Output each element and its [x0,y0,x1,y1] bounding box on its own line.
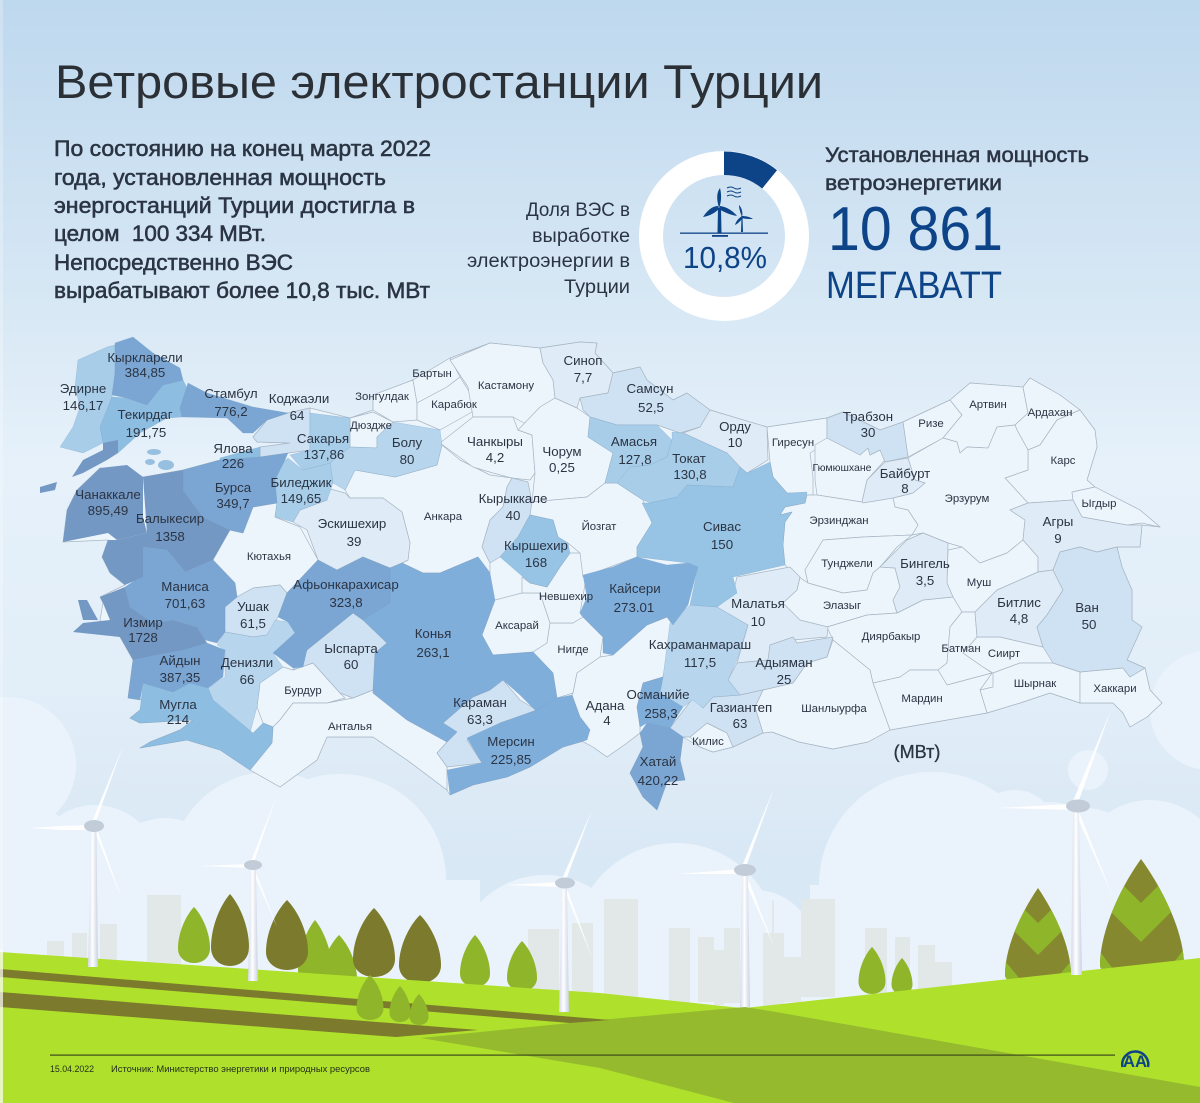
donut chart 10.8% [651,152,797,309]
back trees [178,894,912,995]
label: Орду: Орду [719,419,751,434]
label: Бурдур: Бурдур [284,685,322,697]
label: Мугла: 214 [167,712,189,727]
intro paragraph: целом 100 334 МВт. [54,221,266,246]
label: Балыкесир: 1358 [155,529,185,544]
label: Афьонкарахисар: Афьонкарахисар [293,577,399,592]
label: Чорум: 0,25 [549,460,575,475]
label: Малатья: 10 [751,614,765,629]
label: Карабюк: Карабюк [431,399,478,411]
installed capacity heading [825,144,1089,195]
label: Чанаккале: Чанаккале [75,487,141,502]
label: Эдирне: 146,17 [63,398,103,413]
label: Эдирне: Эдирне [60,381,106,396]
intro paragraph: По состоянию на конец марта 2022 [54,136,431,161]
label: Коджаэли: 64 [290,408,304,423]
label: Караман: Караман [453,695,507,710]
label: Маниса: 701,63 [165,596,205,611]
label: Амасья: Амасья [611,434,657,449]
label: Ушак: Ушак [237,599,269,614]
AA logo: AA [1123,1052,1147,1071]
label: Гюмюшхане: Гюмюшхане [813,462,872,474]
label: Агры: Агры [1043,514,1073,529]
share caption: Турции [564,277,630,298]
label: Конья: 263,1 [416,645,450,660]
label: Битлис: 4,8 [1010,611,1028,626]
label: Синоп: 7,7 [574,370,592,385]
label: Измир: 1728 [128,630,158,645]
brown stripe upper [0,969,610,1023]
label: Муш: Муш [967,577,991,589]
provinces without data [213,343,1162,790]
share caption: электроэнергии в [467,251,630,272]
label: Мерсин: 225,85 [491,752,531,767]
label: Элазыг: Элазыг [823,600,861,612]
label: Ризе: Ризе [918,418,944,430]
label: Ардахан: Ардахан [1028,407,1072,419]
map labels with capacity values [60,350,1099,788]
icon: wind turbines [680,187,768,237]
label: Денизли: 66 [240,672,254,687]
label: Гиресун: Гиресун [772,437,814,449]
label: Эрзинджан: Эрзинджан [809,515,869,527]
label: Ыгдыр: Ыгдыр [1082,498,1116,510]
label: Невшехир: Невшехир [539,591,593,603]
share caption: выработке [532,226,630,247]
brown stripe lower [0,992,478,1037]
label: Стамбул: Стамбул [204,386,258,401]
wind turbine 1 [30,746,123,967]
label: Газиантеп: 63 [733,716,747,731]
label: Сакарья: Сакарья [297,431,349,446]
label: Караман: 63,3 [467,712,493,727]
label: Тунджели: Тунджели [821,558,873,570]
map labels without values [247,368,1137,748]
label: Йозгат: Йозгат [582,520,617,533]
label: Кырыккале: 40 [506,508,520,523]
label: Мерсин: Мерсин [487,734,535,749]
label: Кастамону: Кастамону [478,380,534,392]
label: Токат: 130,8 [673,467,707,482]
unit label: (МВт) [894,742,940,762]
label: Синоп: Синоп [564,353,602,368]
western dark provinces [40,440,230,660]
label: Адыяман: Адыяман [755,655,813,670]
label: Анталья: Анталья [328,721,372,733]
label: Трабзон: 30 [861,425,875,440]
label: Кыршехир: Кыршехир [504,538,568,553]
wind turbine 4 [678,788,774,1007]
intro paragraph: года, установленная мощность [54,165,386,190]
label: Зонгулдак: Зонгулдак [355,391,410,403]
label: Болу: 80 [400,452,414,467]
big tree right [1100,859,1184,969]
big tree left [1005,888,1071,980]
label: Османийе: Османийе [626,687,690,702]
label: Эрзурум: Эрзурум [945,493,989,505]
label: Шанлыурфа: Шанлыурфа [801,703,867,715]
label: Айдын: Айдын [160,653,200,668]
label: Болу: Болу [392,435,422,450]
wind turbine 5 [998,710,1113,975]
installed capacity heading: Установленная мощность [825,144,1089,167]
lightly shaded provinces [293,342,1142,663]
wind turbine 2 [199,798,277,981]
label: Адыяман: 25 [777,672,791,687]
label: Кахраманмараш: 117,5 [684,655,716,670]
title: Ветровые электростанции Турции [55,55,823,108]
capacity unit: МЕГАВАТТ [826,265,1002,307]
label: Эскишехир: Эскишехир [318,516,386,531]
label: Конья: Конья [415,626,451,641]
label: Хатай: Хатай [640,754,676,769]
label: Сиирт: Сиирт [988,648,1021,660]
label: Кыршехир: 168 [525,555,547,570]
intro paragraph [54,136,431,303]
footer source: Источник: Министерство энергетики и природных ресурсов [111,1064,370,1075]
footer date: 15.04.2022 [50,1064,94,1075]
label: Нигде: Нигде [557,644,589,656]
label: Шырнак: Шырнак [1014,678,1057,690]
label: Артвин: Артвин [969,399,1007,411]
map of Turkey provinces [40,337,1162,810]
label: Хатай: 420,22 [638,773,678,788]
label: Измир: Измир [123,615,163,630]
label: Афьонкарахисар: 323,8 [329,595,363,610]
capacity number: 10 861 [828,195,1003,264]
label: Анкара: Анкара [424,511,463,523]
country silhouette [63,342,1162,810]
label: Бурса: Бурса [215,480,252,495]
Marmara islands [145,449,174,470]
label: Трабзон: Трабзон [843,409,893,424]
label: Токат: Токат [672,451,706,466]
label: Дюздже: Дюздже [350,420,392,432]
label: Малатья: Малатья [731,596,785,611]
label: Ыспарта: 60 [344,657,358,672]
label: Сивас: Сивас [703,519,741,534]
left page margin [0,0,3,1103]
label: Бингель: Бингель [900,556,950,571]
label: Адана: Адана [586,698,625,713]
label: Чанаккале: 895,49 [88,503,128,518]
label: Самсун: Самсун [627,381,673,396]
label: Килис: Килис [692,736,724,748]
label: Аксарай: Аксарай [495,620,539,632]
label: Балыкесир: Балыкесир [136,511,204,526]
label: Диярбакыр: Диярбакыр [862,631,920,643]
label: Байбурт: 8 [901,481,909,496]
darker green field [421,1007,1200,1103]
label: Ялова: Ялова [213,441,253,456]
label: Ван: 50 [1082,617,1096,632]
label: Чорум: Чорум [542,444,582,459]
label: Батман: Батман [941,643,981,655]
footer rule [50,1054,1115,1056]
label: Коджаэли: Коджаэли [269,391,329,406]
hill right [400,958,1200,1103]
label: Кайсери: 273.01 [614,600,654,615]
label: Стамбул: 776,2 [214,404,248,419]
label: Ыспарта: Ыспарта [324,641,378,656]
label: Байбурт: Байбурт [880,466,930,481]
label: Кырыккале: Кырыккале [479,491,547,506]
label: Чанкыры: 4,2 [486,450,504,465]
label: Кыркларели: Кыркларели [107,350,183,365]
label: Кыркларели: 384,85 [125,365,165,380]
label: Кютахья: Кютахья [247,551,291,563]
label: Текирдаг: Текирдаг [117,407,173,422]
label: Биледжик: Биледжик [271,475,332,490]
label: Мугла: Мугла [159,697,197,712]
share caption: Доля ВЭС в [526,200,630,221]
label: Кахраманмараш: Кахраманмараш [649,637,751,652]
label: Адана: 4 [603,713,611,728]
label: Османийе: 258,3 [644,706,678,721]
label: Газиантеп: Газиантеп [710,700,772,715]
label: Карс: Карс [1050,455,1076,467]
clouds [0,650,1200,1055]
label: Битлис: Битлис [997,595,1041,610]
label: Бурса: 349,7 [216,496,250,511]
label: Текирдаг: 191,75 [126,425,166,440]
label: Хаккари: Хаккари [1093,683,1137,695]
label: Агры: 9 [1054,531,1062,546]
label: Бингель: 3,5 [916,573,934,588]
label: Эскишехир: 39 [347,534,361,549]
label: Кайсери: Кайсери [609,581,661,596]
intro paragraph: Непосредственно ВЭС [54,250,293,275]
share caption [467,200,630,298]
label: Айдын: 387,35 [160,670,200,685]
wind turbine 3 [506,810,593,1012]
hill left [0,952,760,1103]
city skyline [47,895,952,1008]
label: Сивас: 150 [711,537,733,552]
front small trees [356,975,428,1025]
intro paragraph: энергостанций Турции достигла в [54,193,415,218]
label: Ялова: 226 [222,456,244,471]
label: Ван: Ван [1075,600,1099,615]
label: Сакарья: 137,86 [304,447,344,462]
label: Орду: 10 [728,435,742,450]
label: Денизли: Денизли [221,655,273,670]
label: Мардин: Мардин [901,693,943,705]
label: Биледжик: 149,65 [281,491,321,506]
label: Ушак: 61,5 [240,616,266,631]
intro paragraph: вырабатывают более 10,8 тыс. МВт [54,278,430,303]
label: Амасья: 127,8 [618,452,652,467]
label: Чанкыры: Чанкыры [467,434,523,449]
shaded provinces with stronger capacity [60,337,807,810]
label: Маниса: Маниса [161,579,209,594]
label: Самсун: 52,5 [638,400,664,415]
label: Бартын: Бартын [412,368,452,380]
donut value: 10,8% [683,240,767,275]
installed capacity heading: ветроэнергетики [825,172,1002,195]
